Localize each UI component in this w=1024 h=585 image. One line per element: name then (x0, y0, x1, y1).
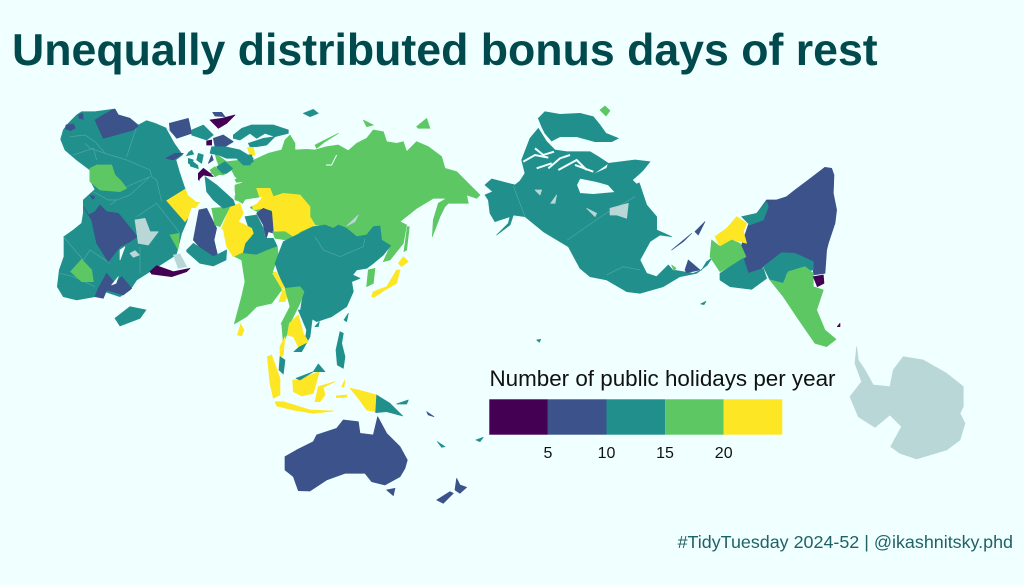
Greenland (538, 112, 618, 142)
Iceland (600, 106, 610, 116)
legend tick labels: 5 (544, 445, 553, 462)
Arabian peninsula blue (193, 208, 218, 259)
China (275, 225, 391, 322)
legend colour scale (489, 399, 782, 435)
legend title: Number of public holidays per year (490, 366, 836, 391)
map: North America (485, 106, 712, 342)
Red Sea (178, 208, 196, 250)
legend tick labels: 15 (656, 445, 674, 462)
Somalia wedge (167, 187, 200, 222)
Black Sea (213, 177, 242, 195)
map: Southeast Asia and Oceania (267, 310, 483, 503)
title: Unequally distributed bonus days of rest (12, 26, 878, 75)
Canada, USA and Mexico (485, 160, 712, 293)
India (234, 247, 282, 324)
New Zealand (437, 492, 453, 503)
Australia (285, 417, 407, 491)
Arctic archipelago (520, 128, 608, 185)
map: Europe (166, 112, 288, 208)
legend (489, 366, 836, 462)
legend tick labels (544, 445, 733, 462)
Tunisia (65, 124, 75, 131)
legend tick labels: 20 (715, 445, 733, 462)
map: Antarctica (850, 347, 965, 459)
Russia (235, 130, 480, 262)
Madagascar (115, 307, 146, 326)
legend tick labels: 10 (598, 445, 616, 462)
map: Africa (57, 109, 200, 326)
Mediterranean (167, 128, 215, 202)
Scandinavia (233, 125, 288, 140)
credit line: #TidyTuesday 2024-52 | @ikashnitsky.phd (678, 532, 1013, 552)
map: Asia (187, 109, 480, 336)
map: South America (710, 167, 840, 347)
